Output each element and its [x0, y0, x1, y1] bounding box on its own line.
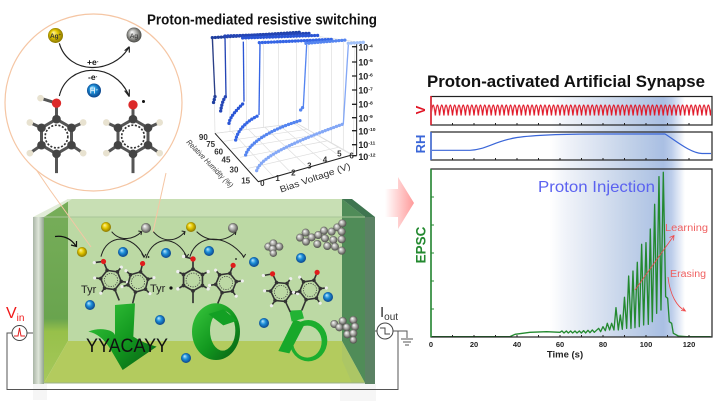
- 3D resistive switching plot: Bias Voltage (V): [278, 161, 352, 195]
- ribbon: coil peptide: [278, 310, 327, 361]
- 3D resistive switching plot: 75: [206, 140, 216, 149]
- 3D resistive switching plot: 4: [323, 156, 328, 165]
- molecule: tyrosine radical 3: [287, 264, 333, 316]
- circuit wiring: [7, 331, 413, 390]
- molecule: tyrosine 1: [87, 252, 134, 306]
- 3D resistive switching plot: -8: [368, 100, 373, 106]
- icon: Ag atom: Ag: [130, 33, 138, 40]
- 3D resistive switching plot: 45: [222, 156, 231, 165]
- label: -e-: -: [96, 74, 98, 80]
- 3D resistive switching plot: [185, 32, 376, 195]
- 3D resistive switching plot: 10: [358, 86, 368, 96]
- silver clusters: [264, 219, 359, 344]
- 3D resistive switching plot: 10: [358, 57, 368, 67]
- 3D resistive switching plot: -6: [368, 72, 373, 78]
- zoom circle: [5, 14, 182, 191]
- 3D resistive switching plot: -11: [368, 141, 375, 147]
- label: V in: in: [17, 313, 24, 324]
- protons: [85, 246, 333, 363]
- time axis tick labels: 60: [556, 340, 564, 349]
- molecule: tyrosine radical 1: [117, 257, 159, 307]
- icon: Ag+ ion: Ag: [50, 33, 59, 40]
- input voltage source: [12, 326, 27, 340]
- radical dot: [142, 100, 145, 103]
- callout leader lines: [33, 165, 166, 247]
- 3D resistive switching plot: -9: [368, 114, 373, 120]
- 3D resistive switching plot: -7: [368, 86, 373, 92]
- ribbon: arrow peptide: [88, 303, 157, 370]
- 3D resistive switching plot: -5: [368, 58, 373, 64]
- label: EPSC: EPSC: [414, 226, 428, 263]
- output current meter: [377, 323, 393, 339]
- icon: proton: H: [90, 86, 96, 96]
- silver ions and gold ions: [77, 222, 238, 257]
- icon: proton: [87, 84, 101, 98]
- 3D resistive switching plot: Relative Humidity (%): [185, 138, 235, 190]
- arrow: erasing: [668, 277, 686, 311]
- icon: proton: +: [96, 88, 99, 92]
- label: I out: I: [380, 304, 384, 321]
- 3D resistive switching plot: 10: [358, 126, 368, 136]
- molecule: tyrosine 3: [256, 263, 305, 319]
- label: time axis: Time (s): [547, 350, 583, 360]
- 3D resistive switching plot: 10: [358, 140, 368, 150]
- label: learning: Learning: [665, 223, 708, 234]
- 3D resistive switching plot: -4: [368, 43, 373, 49]
- label: peptide sequence: YYACAYY: [86, 336, 168, 357]
- label: +e-: -: [97, 59, 99, 65]
- label: erasing: Erasing: [670, 269, 706, 280]
- title: proton-activated artificial synapse: Proton-activated Artificial Synapse: [427, 72, 705, 91]
- circle reaction arcs: [59, 43, 129, 97]
- 3D resistive switching plot: 2: [291, 168, 296, 177]
- 3D resistive switching plot: 10: [358, 113, 368, 123]
- device reflection: [33, 384, 376, 401]
- label: I out: out: [384, 312, 398, 323]
- 3D resistive switching plot: -12: [368, 153, 376, 159]
- 3D resistive switching plot: 10: [358, 100, 368, 110]
- 3D resistive switching plot: 10: [358, 72, 368, 82]
- proton injection shaded band: [550, 96, 685, 337]
- 3D resistive switching plot: 30: [230, 166, 239, 175]
- panel: voltage trace: [431, 96, 712, 125]
- 3D resistive switching plot: 3: [307, 162, 312, 171]
- molecule: tyrosine 2: [176, 255, 210, 303]
- panel: relative humidity trace: [431, 132, 712, 160]
- molecule: tyrosine: [27, 95, 86, 173]
- molecule: tyrosine radical: [103, 100, 163, 173]
- label: +e-: +e: [87, 57, 97, 67]
- 3D resistive switching plot: 5: [337, 150, 342, 159]
- molecule: tyrosine radical 2: [203, 257, 249, 309]
- label: RH: RH: [413, 135, 428, 153]
- label: Tyr: Tyr: [81, 284, 97, 296]
- arrow: ion entering: [55, 236, 76, 246]
- radical dots: [148, 256, 237, 290]
- electron transfer arcs: [101, 231, 246, 258]
- device box: [33, 199, 375, 384]
- icon: Ag+ ion: [48, 28, 63, 43]
- ribbon: loop peptide: [192, 303, 240, 360]
- big arrow: [385, 177, 414, 229]
- 3D resistive switching plot: 1: [275, 174, 280, 183]
- 3D resistive switching plot: 10: [358, 43, 368, 53]
- time axis tick labels: 100: [640, 340, 652, 349]
- label: V: V: [413, 105, 428, 114]
- label: Tyr radical: Tyr: [150, 283, 166, 295]
- 3D resistive switching plot: 60: [214, 148, 224, 157]
- icon: Ag atom: [126, 28, 142, 42]
- time axis tick labels: 80: [599, 340, 607, 349]
- time axis tick labels: [429, 340, 695, 349]
- label: V in: V: [6, 305, 17, 322]
- 3D resistive switching plot: -10: [368, 127, 376, 133]
- label: proton injection: Proton Injection: [538, 179, 655, 196]
- time axis tick labels: 20: [470, 340, 478, 349]
- 3D resistive switching plot: 10: [358, 152, 368, 162]
- time axis tick labels: 0: [429, 340, 433, 349]
- panel: EPSC trace: [431, 169, 712, 337]
- 3D resistive switching plot: 6: [349, 152, 354, 161]
- 3D resistive switching plot: 0: [260, 179, 265, 188]
- time axis tick labels: 120: [683, 340, 695, 349]
- title: proton-mediated resistive switching: Proton-mediated resistive switching: [147, 12, 377, 28]
- time axis tick labels: 40: [513, 340, 521, 349]
- icon: Ag+ ion: +: [59, 32, 62, 37]
- arrow: learning: [635, 236, 674, 290]
- label: -e-: -e: [88, 72, 96, 82]
- 3D resistive switching plot: 90: [199, 133, 208, 142]
- 3D resistive switching plot: 15: [241, 176, 251, 185]
